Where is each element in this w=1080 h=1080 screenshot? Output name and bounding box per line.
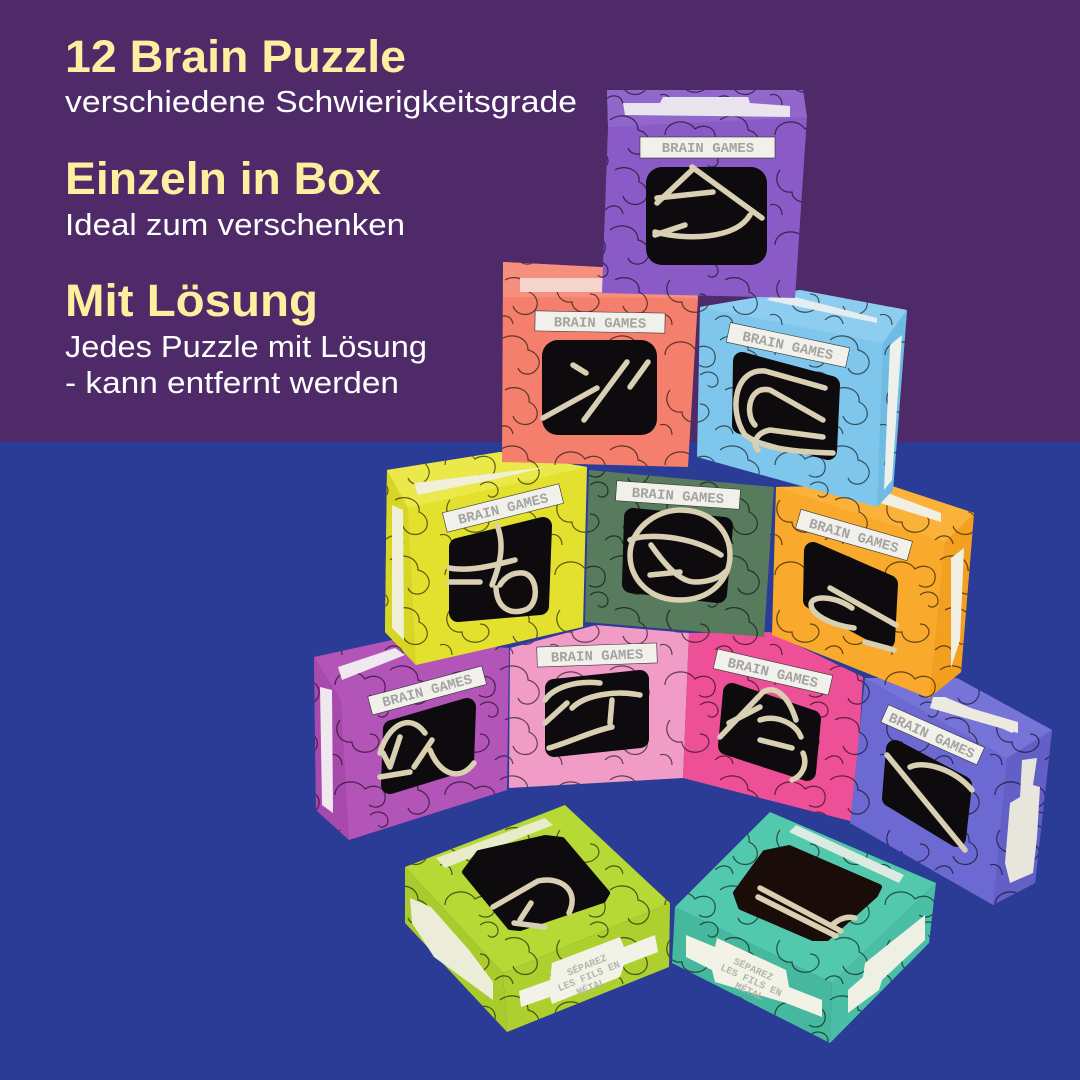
purple header background — [0, 0, 1080, 442]
box: light pink: BRAIN GAMES — [551, 647, 644, 667]
box: violet top: BRAIN GAMES — [662, 141, 754, 157]
text: verschiedene Schwierigkeitsgrade: verschiedene Schwierigkeitsgrade — [65, 84, 577, 119]
heading: Einzeln in Box: Einzeln in Box — [65, 153, 381, 204]
box: orange — [772, 485, 974, 698]
heading: Mit Lösung: Mit Lösung — [65, 275, 318, 326]
box: orchid — [314, 640, 509, 840]
box: violet top — [602, 90, 807, 298]
box: periwinkle: BRAIN GAMES — [886, 711, 977, 763]
box: lime flat: SÉPAREZ — [565, 951, 609, 980]
box: hot pink: BRAIN GAMES — [726, 656, 819, 692]
heading: 12 Brain Puzzle: 12 Brain Puzzle — [65, 31, 406, 82]
text: Jedes Puzzle mit Lösung - kann entfernt werden: - kann entfernt werden — [65, 365, 399, 400]
box: green: BRAIN GAMES — [631, 486, 725, 508]
box: light blue: BRAIN GAMES — [741, 330, 834, 364]
box: yellow — [385, 452, 587, 665]
box: green — [585, 470, 774, 637]
box: lime flat: MÉTAL — [574, 975, 607, 999]
box: teal flat: MÉTAL — [733, 979, 766, 1004]
box: coral: BRAIN GAMES — [554, 315, 646, 333]
text: Jedes Puzzle mit Lösung - kann entfernt werden: Jedes Puzzle mit Lösung — [65, 329, 427, 364]
box: teal flat — [672, 812, 936, 1043]
box: coral — [502, 262, 698, 467]
box: periwinkle — [850, 678, 1052, 905]
box: teal flat: SÉPAREZ — [731, 954, 775, 984]
box: hot pink — [683, 632, 863, 822]
box: teal flat: LES FILS EN — [718, 963, 783, 1000]
box: lime flat: LES FILS EN — [557, 960, 622, 995]
box: light pink — [509, 625, 689, 788]
box: orchid: BRAIN GAMES — [381, 672, 474, 712]
box: yellow: BRAIN GAMES — [457, 491, 550, 529]
blue lower background — [0, 442, 1080, 1080]
text: Jedes Puzzle mit Lösung - kann entfernt werden — [65, 329, 427, 400]
box: light blue — [697, 290, 907, 507]
text: Ideal zum verschenken: Ideal zum verschenken — [65, 207, 405, 242]
box: orange: BRAIN GAMES — [807, 516, 900, 557]
box: lime flat — [405, 805, 670, 1032]
